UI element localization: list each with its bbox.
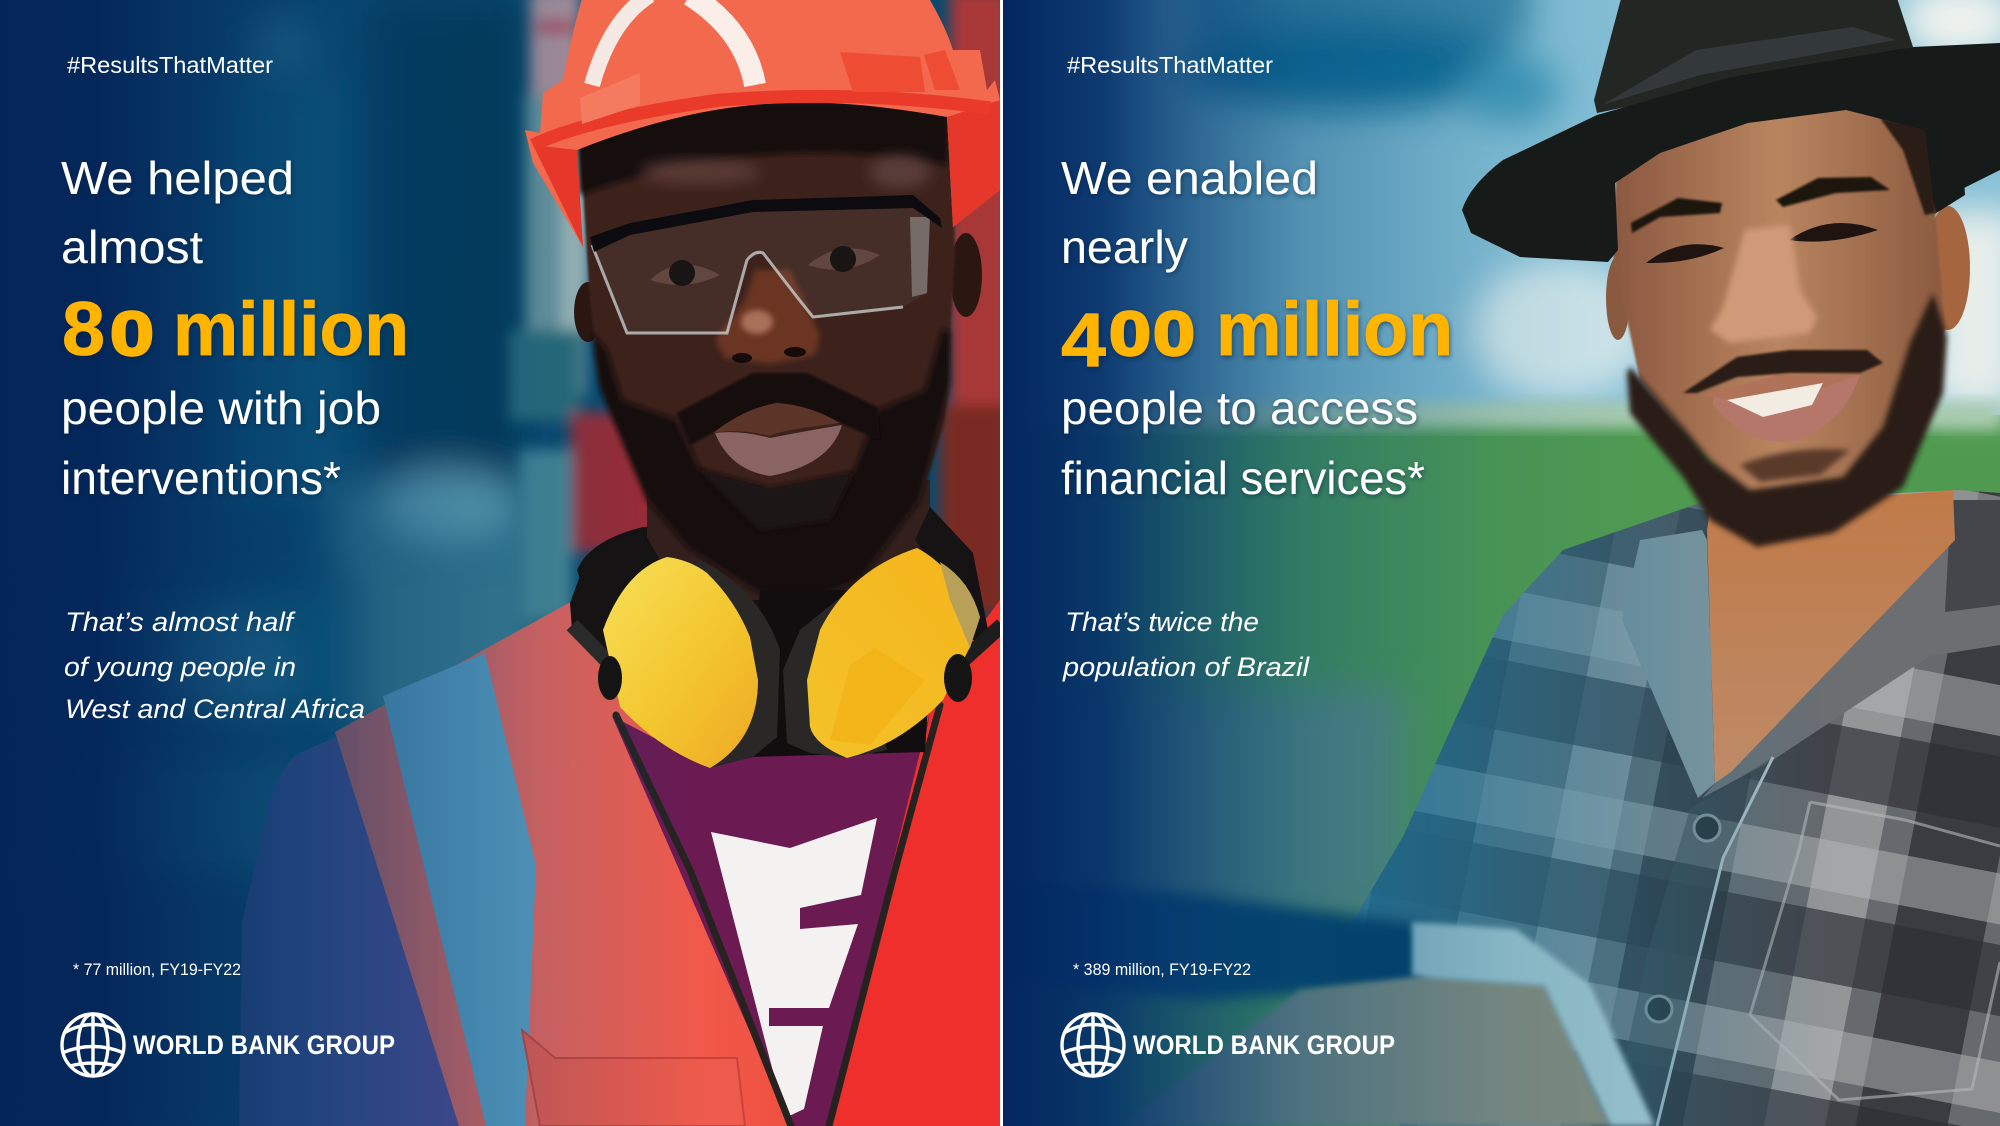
headline: people to access [1061,382,1418,434]
vest zippers [616,705,940,1126]
worker: sleeve [239,735,480,1126]
farmer: ears [1606,206,1970,340]
blurred factory background [0,0,1010,1126]
headline: people with job [61,382,381,434]
hashtag: #ResultsThatMatter [67,52,273,78]
highlighted figure: 8 [62,287,105,372]
eyes [1646,223,1878,263]
headband [570,507,1002,672]
comparison note: of young people in [64,652,296,682]
highlighted figure: million [173,287,409,372]
highlighted figure [64,300,406,360]
worker: face [574,100,982,605]
highlighted figure: million [1216,287,1453,372]
headline: financial services* [1061,452,1425,504]
divider [1000,0,1003,1126]
eyes [650,246,880,286]
highlighted figure: 0 [1109,300,1151,369]
blurred laptop [1003,880,1655,1126]
headline: We helped [61,152,294,204]
shirt blue tint [1351,500,1830,1126]
hat underside [1860,100,1965,220]
panel: financial services (right) [1003,0,2000,1126]
shirt collar right [1702,500,2000,798]
highlighted figure: 0 [110,300,154,369]
moustache [1683,350,1883,393]
headline: almost [61,221,203,273]
navy gradient overlay [0,0,670,1126]
World Bank Group logo [1062,1014,1395,1076]
highlighted figure: 0 [1153,300,1195,369]
farmer: black hat [1462,0,2000,262]
icon: globe [1062,1014,1124,1076]
icon: globe [62,1014,124,1076]
highlighted figure [1061,287,1453,383]
World Bank Group logo: WORLD BANK GROUP [1133,1030,1395,1060]
shirt placket [1610,757,1773,1126]
eyebrows [1631,177,1890,233]
shirt collar left [1622,530,1715,798]
mouth [1705,375,1860,442]
vest reflective strip [383,653,536,1126]
worker: collar and neck [577,480,990,640]
headline [61,152,409,504]
panel: jobs (left) [0,0,1010,1126]
comparison note: That’s twice the [1065,607,1259,637]
worker: t-shirt [612,707,931,1126]
comparison note: population of Brazil [1062,652,1310,682]
hard hat [525,0,1000,247]
earmuffs [570,507,1002,768]
World Bank Group logo: WORLD BANK GROUP [133,1030,395,1060]
nose [715,270,820,364]
worker: vest [335,600,1000,1126]
blurred sky and field background [1003,0,2000,1126]
World Bank Group logo [62,1014,395,1076]
beard [1627,293,1947,547]
farmer: neck [1707,490,1955,783]
navy gradient overlay [1003,0,2000,1126]
temple hair [1880,118,1935,215]
hashtag: #ResultsThatMatter [1067,52,1273,78]
headline: We enabled [1061,152,1318,204]
farmer: plaid shirt [1351,490,2000,1126]
footnote: * 77 million, FY19-FY22 [73,960,241,979]
beard [592,330,950,605]
vest pocket [522,1030,745,1126]
headline [1061,152,1453,504]
comparison note [64,607,365,724]
comparison note: West and Central Africa [65,694,365,724]
left cup [603,557,758,768]
shirt buttons [1646,815,1720,1022]
safety goggles [590,195,942,333]
highlighted figure: 4 [1061,298,1106,383]
lips [713,403,842,476]
headline: interventions* [61,452,341,504]
shirt pocket [1750,802,2000,1100]
comparison note: That’s almost half [65,607,296,637]
comparison note [1062,607,1310,682]
headline: nearly [1061,221,1188,273]
hat highlights [580,0,960,124]
nose [1710,225,1817,343]
moustache [677,373,880,445]
footnote: * 389 million, FY19-FY22 [1073,960,1251,979]
farmer: face [1612,90,1947,547]
right cup [807,548,980,758]
